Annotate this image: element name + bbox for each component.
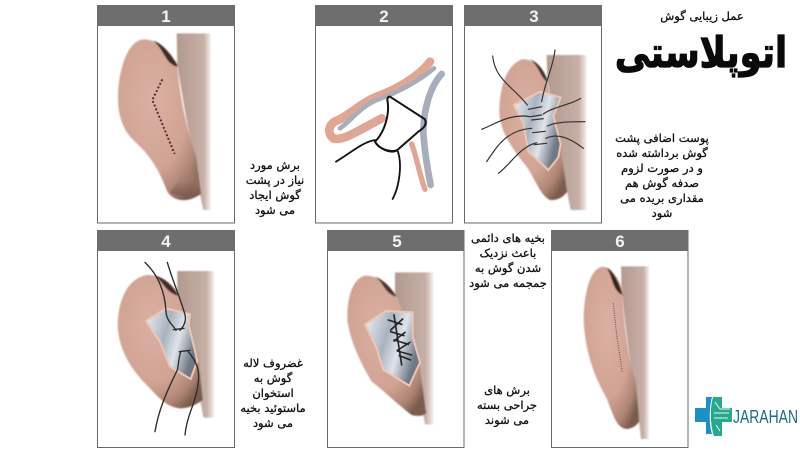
panel 6: final result: 6 <box>615 232 625 251</box>
caption: step 3: و در صورت لزوم <box>621 161 703 175</box>
panel 5: closed cartilage stitches: 5 <box>392 232 402 251</box>
caption: step 4: غضروف لاله <box>243 356 303 370</box>
caption: step 4: ماستوئید بخیه <box>240 401 306 415</box>
panel 1: incision line: 1 <box>161 7 171 26</box>
caption: step 5 top: باعث نزدیک <box>480 246 536 260</box>
caption: step 3 <box>615 131 709 220</box>
panel 1: incision line <box>97 5 235 223</box>
caption: step 5 bottom: برش های <box>484 383 530 397</box>
panel 2: suture cross-section <box>315 5 453 223</box>
caption: step 3: صدفه گوش هم <box>625 176 699 190</box>
caption: step 3: مقداری بریده می <box>620 191 704 205</box>
subtitle: عمل زیبایی گوش <box>660 9 744 23</box>
caption: step 4: می شود <box>253 416 293 430</box>
caption: step 5 bottom: می شوند <box>485 413 529 427</box>
caption: step 4 <box>240 356 306 430</box>
caption: step 3: گوش برداشته شده <box>616 146 708 160</box>
caption: step 3: شود <box>652 206 672 220</box>
caption: step 5 top: جمجمه می شود <box>469 276 547 290</box>
caption: step 5 top <box>469 231 547 290</box>
caption: step 1: نیاز در پشت <box>246 173 304 187</box>
panel 2: suture cross-section: 2 <box>379 7 389 26</box>
caption: step 4: گوش به <box>254 371 292 385</box>
panel 6: final result <box>551 230 688 448</box>
caption: step 5 bottom: جراحی بسته <box>477 398 537 412</box>
caption: step 1: گوش ایجاد <box>249 188 301 202</box>
panel 4: cartilage sutured to mastoid <box>97 230 235 448</box>
title: اتوپلاستی <box>615 28 787 77</box>
caption: step 3: پوست اضافی پشت <box>615 131 709 145</box>
caption: step 5 top: بخیه های دائمی <box>471 231 545 245</box>
caption: step 1: می شود <box>255 203 295 217</box>
caption: step 5 top: شدن گوش به <box>475 261 541 275</box>
panel 3: excised skin and sutures: 3 <box>529 7 539 26</box>
caption: step 1: برش مورد <box>250 158 300 172</box>
caption: step 1 <box>246 158 304 218</box>
caption: step 4: استخوان <box>252 386 294 400</box>
panel 3: excised skin and sutures <box>464 5 602 223</box>
panel 4: cartilage sutured to mastoid: 4 <box>161 232 171 251</box>
panel 5: closed cartilage stitches <box>327 230 464 448</box>
logo: Jarahan <box>695 397 798 436</box>
caption: step 5 bottom <box>477 383 537 428</box>
